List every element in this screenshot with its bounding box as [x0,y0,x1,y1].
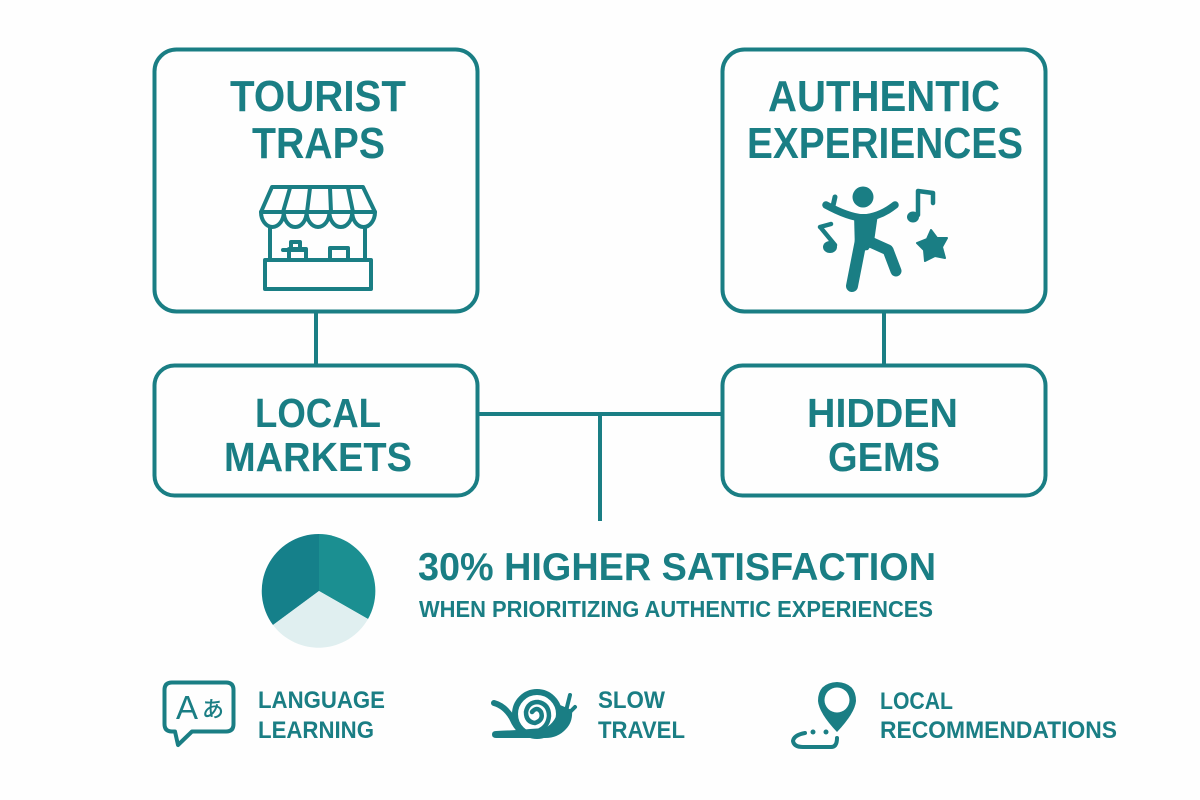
panel: tourist traps [154,50,478,312]
panel: hidden gems [722,366,1046,496]
heading: local markets: LOCAL [255,390,381,436]
icon: language speech bubble: A [176,689,198,726]
label: slow travel: SLOW [598,687,665,714]
connector lines [316,312,884,521]
heading: tourist traps [230,73,406,168]
label: local recommendations: RECOMMENDATIONS [880,717,1117,744]
statistic subtitle: WHEN PRIORITIZING AUTHENTIC EXPERIENCES [419,596,933,622]
label: local recommendations [880,688,1117,744]
icon: dancer with notes and star [820,186,947,286]
icon: market stall [261,187,375,289]
icon: language speech bubble [164,682,234,745]
icon: language speech bubble: あ [202,692,224,724]
heading: local markets [224,390,412,480]
label: language learning: LANGUAGE [258,687,385,714]
panel: authentic experiences [722,50,1046,312]
heading: authentic experiences: AUTHENTIC [768,73,1000,121]
icon: snail [492,692,575,738]
heading: hidden gems: HIDDEN [807,390,958,436]
heading: tourist traps: TRAPS [252,120,385,168]
icon: map pin with route [793,682,856,747]
heading: local markets: MARKETS [224,434,412,480]
heading: authentic experiences: EXPERIENCES [747,120,1023,168]
label: slow travel [598,687,685,744]
label: language learning: LEARNING [258,717,374,744]
statistic headline: 30% HIGHER SATISFACTION [418,546,936,589]
label: slow travel: TRAVEL [598,717,685,744]
heading: authentic experiences [747,73,1023,168]
heading: hidden gems [807,390,958,480]
heading: tourist traps: TOURIST [230,73,406,121]
panel: local markets [154,366,478,496]
label: language learning [258,687,385,744]
heading: hidden gems: GEMS [828,434,940,480]
pie chart [262,534,375,648]
label: local recommendations: LOCAL [880,688,953,715]
